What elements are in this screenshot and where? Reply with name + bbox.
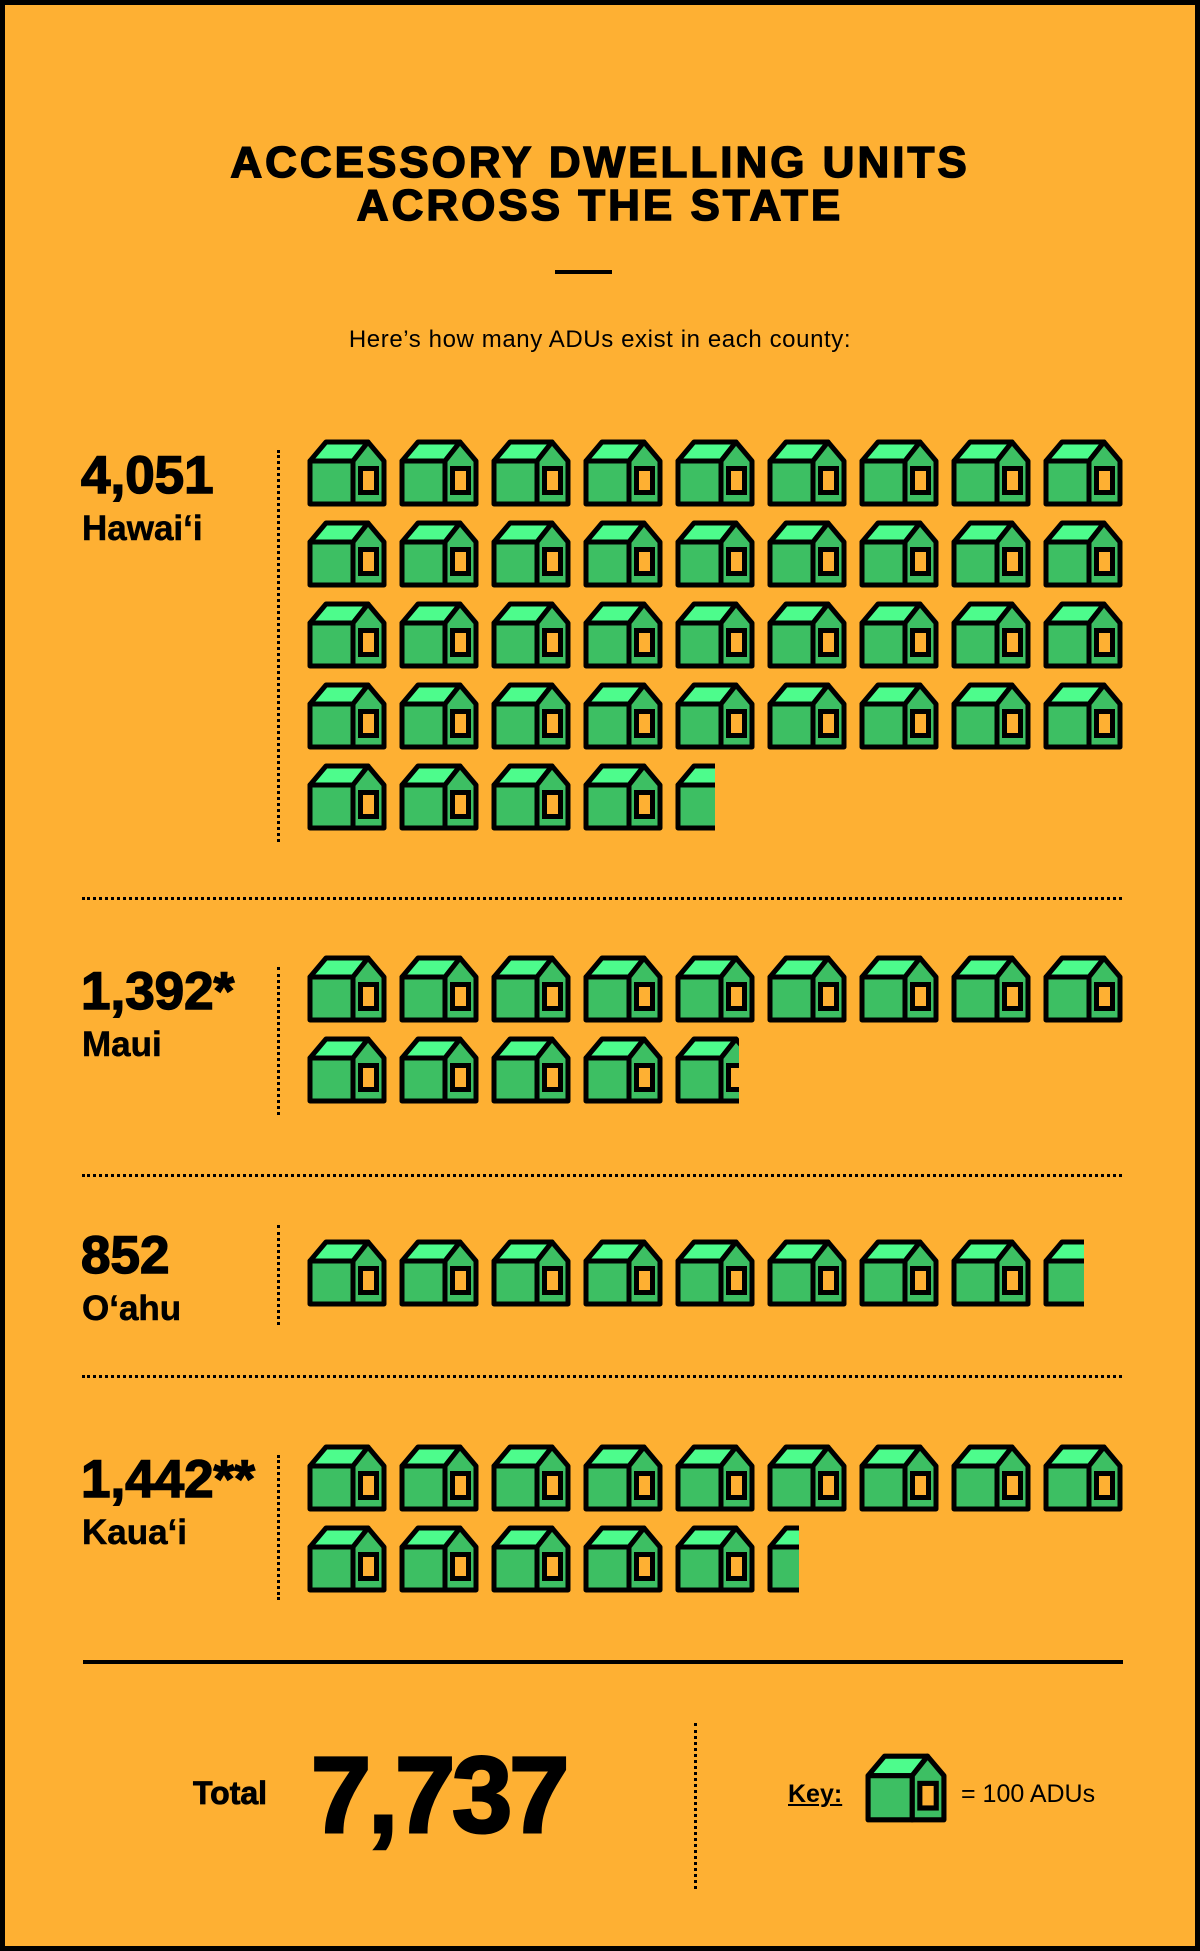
total: Total [193,1775,267,1811]
label: Kauai: Kaua‘i [82,1513,187,1552]
title: ACCESSORY DWELLING UNITS [230,138,970,187]
title underline dash [555,270,612,274]
label: Oahu: O‘ahu [82,1289,181,1328]
pictograph: Maui [308,956,1122,1104]
label: Oahu: 852 [81,1226,169,1285]
title [230,138,970,230]
key: Key: [788,1780,842,1808]
label: Maui [81,962,236,1064]
label: Maui: Maui [82,1025,162,1064]
label: Oahu [81,1226,181,1328]
total: 7,737 [311,1734,566,1855]
label: Maui: 1,392* [81,962,234,1021]
pictograph: Kauai [308,1444,1122,1592]
title: ACROSS THE STATE [357,181,843,230]
subtitle: Here’s how many ADUs exist in each county: [349,326,851,353]
label: Kauai [81,1450,256,1552]
key: = 100 ADUs [961,1780,1095,1808]
label: Hawaii: Hawai‘i [82,509,203,548]
label: Hawaii: 4,051 [81,446,214,505]
pictograph: Oahu [308,1240,1084,1306]
label: Kauai: 1,442** [81,1450,255,1509]
pictograph: Hawaii [308,440,1122,830]
key [788,1754,1095,1822]
label: Hawaii [81,446,214,548]
total [192,1734,566,1855]
